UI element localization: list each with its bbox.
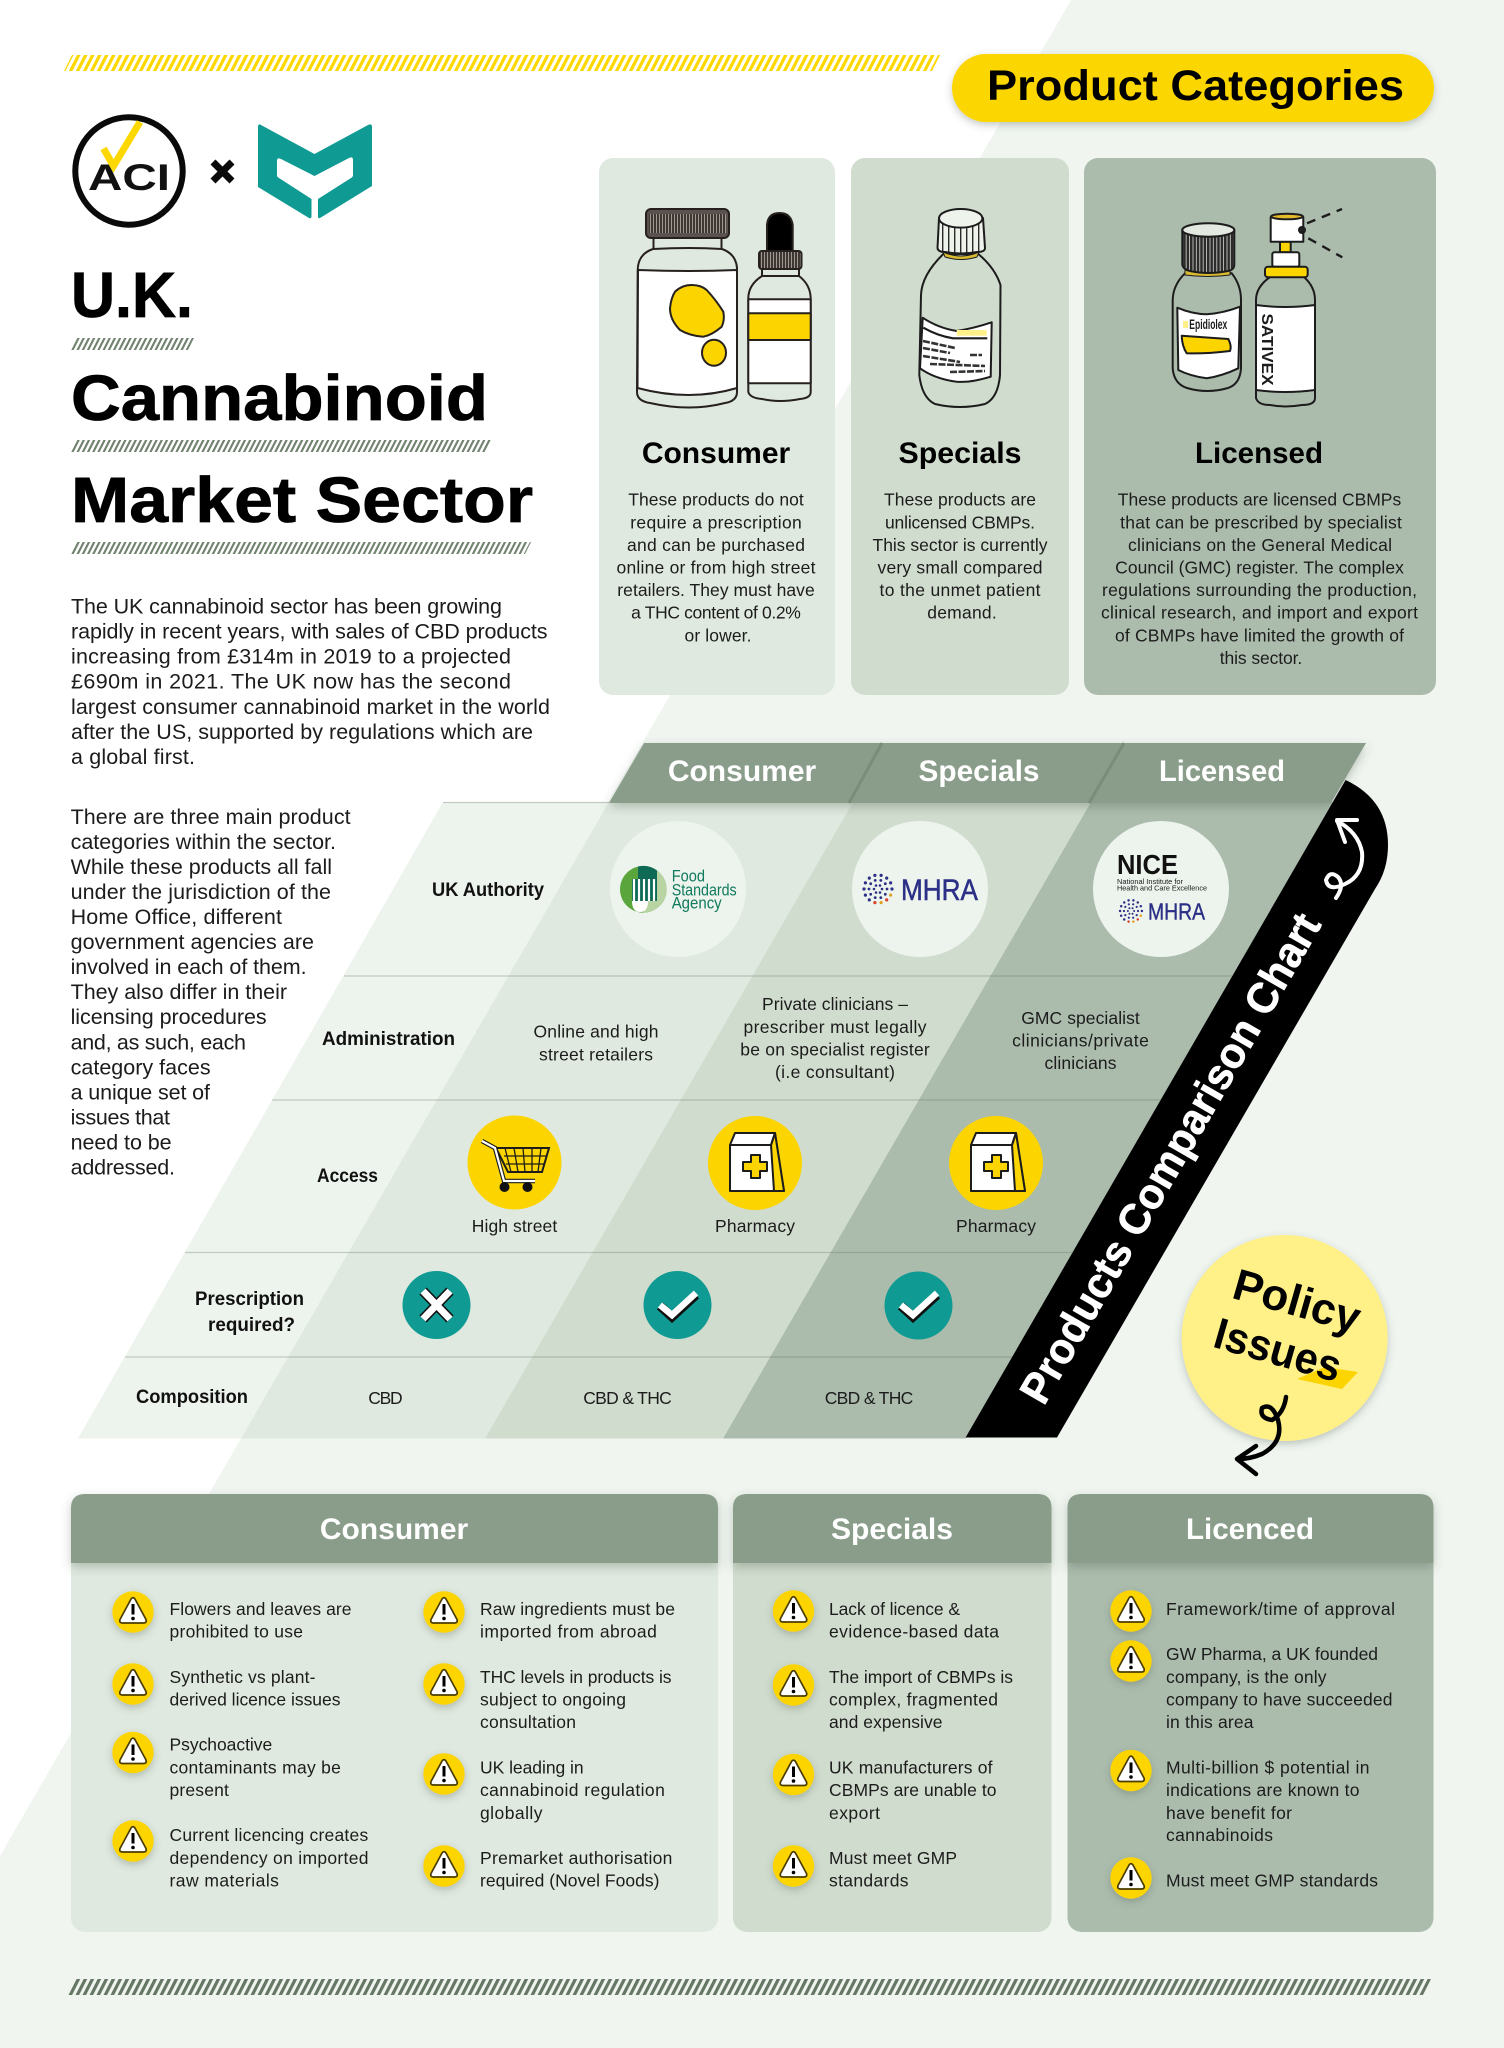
bottom stripe rule bbox=[68, 1979, 1431, 1995]
issue: psychoactive contaminants: contaminants may be bbox=[170, 1758, 341, 1778]
header: Consumer bbox=[71, 1494, 718, 1563]
row labels: UK Authority bbox=[432, 880, 544, 901]
panel: consumer product category bbox=[599, 158, 835, 695]
issue: lack of licence: Lack of licence & bbox=[829, 1599, 960, 1619]
row labels: Administration bbox=[322, 1029, 455, 1050]
issue: GMP standards: Must meet GMP bbox=[829, 1848, 957, 1868]
issue: THC levels: subject to ongoing bbox=[480, 1690, 626, 1710]
intro paragraph 2: addressed. bbox=[71, 1156, 175, 1180]
issue: GMP standards bbox=[1110, 1857, 1378, 1899]
issue: synthetic vs plant: Synthetic vs plant- bbox=[170, 1667, 316, 1687]
issue: UK leading bbox=[423, 1753, 665, 1823]
text: licensed description: These products are licensed CBMPs bbox=[1118, 490, 1401, 510]
text: specials description: unlicensed CBMPs. bbox=[885, 512, 1035, 532]
administration: licensed: clinicians bbox=[1044, 1053, 1117, 1073]
intro paragraph 2: and, as such, each bbox=[71, 1030, 246, 1054]
title: Cannabinoid bbox=[71, 362, 488, 434]
intro paragraph 1: a global first. bbox=[71, 745, 195, 769]
issue: multi-billion potential: Multi-billion $ potential in bbox=[1166, 1758, 1370, 1778]
callout: policy issues: Policy bbox=[1228, 1260, 1367, 1343]
intro paragraph 2: issues that bbox=[71, 1106, 170, 1130]
issue: synthetic vs plant: derived licence issues bbox=[170, 1690, 341, 1710]
text: licensed description: clinicians on the General Medical bbox=[1128, 535, 1392, 555]
issue: GW Pharma: company, is the only bbox=[1166, 1667, 1327, 1687]
text: specials description: demand. bbox=[927, 603, 997, 623]
icon: pharmacy bag bbox=[949, 1116, 1043, 1210]
logo: MHRA: MHRA bbox=[901, 874, 978, 907]
icon: times sign bbox=[213, 162, 232, 181]
issue: multi-billion potential: indications are known to bbox=[1166, 1780, 1360, 1800]
row labels bbox=[136, 880, 544, 1408]
administration: licensed bbox=[1012, 1008, 1149, 1073]
icon: cross bbox=[402, 1271, 470, 1339]
issue: UK leading: cannabinoid regulation bbox=[480, 1780, 665, 1800]
issue: GMP standards: standards bbox=[829, 1870, 909, 1890]
issue: synthetic vs plant bbox=[112, 1663, 341, 1710]
heading: Specials: Specials bbox=[898, 437, 1022, 470]
issue: multi-billion potential bbox=[1110, 1750, 1370, 1845]
chart column: licensed bbox=[723, 802, 1333, 1438]
administration: licensed: GMC specialist bbox=[1021, 1008, 1140, 1028]
issue: UK manufacturers bbox=[773, 1754, 996, 1823]
row labels: Composition bbox=[136, 1387, 248, 1408]
issue: UK manufacturers: export bbox=[829, 1803, 880, 1823]
issue: multi-billion potential: cannabinoids bbox=[1166, 1825, 1273, 1845]
logo: ACI bbox=[75, 117, 183, 225]
label: Pharmacy: Pharmacy bbox=[715, 1216, 795, 1236]
administration: specials: be on specialist register bbox=[740, 1040, 930, 1060]
chart column: labels bbox=[78, 802, 609, 1438]
white diagonal background bbox=[0, 0, 1071, 1856]
yellow stripe rule bbox=[64, 55, 940, 71]
row labels: required? bbox=[208, 1315, 295, 1336]
administration: consumer: street retailers bbox=[539, 1045, 653, 1065]
intro paragraph 2: There are three main product bbox=[71, 805, 351, 829]
issue: import of CBMPs: and expensive bbox=[829, 1712, 942, 1732]
issue: current licencing: dependency on imported bbox=[170, 1848, 368, 1868]
icon: shopping cart bbox=[468, 1116, 562, 1210]
intro paragraph 1: after the US, supported by regulations which are bbox=[71, 720, 533, 744]
text: specials description bbox=[872, 490, 1048, 623]
column header: Specials: Specials bbox=[918, 755, 1040, 788]
heading: Licensed: Licensed bbox=[1195, 437, 1323, 470]
text: consumer description bbox=[616, 490, 816, 645]
logo: teal book mark bbox=[258, 124, 372, 218]
intro paragraph 1: largest consumer cannabinoid market in the world bbox=[71, 695, 550, 719]
issue: GMP standards: Must meet GMP standards bbox=[1166, 1870, 1378, 1890]
issue: UK leading: UK leading in bbox=[480, 1758, 584, 1778]
header: Consumer: Consumer bbox=[320, 1513, 469, 1546]
row labels: Prescription bbox=[195, 1289, 304, 1310]
panel: licenced policy issues bbox=[1068, 1494, 1434, 1932]
issue: raw ingredients: Raw ingredients must be bbox=[480, 1599, 675, 1619]
text: consumer description: and can be purchased bbox=[627, 535, 805, 555]
section pill: Product Categories: Product Categories bbox=[987, 62, 1404, 110]
header: Licenced: Licenced bbox=[1186, 1513, 1314, 1546]
intro paragraph 2: under the jurisdiction of the bbox=[71, 880, 331, 904]
issue: premarket authorisation: Premarket authorisation bbox=[480, 1848, 672, 1868]
intro paragraph 2: licensing procedures bbox=[71, 1005, 267, 1029]
text: consumer description: These products do not bbox=[628, 490, 804, 510]
issue: current licencing bbox=[112, 1820, 369, 1890]
issue: THC levels: consultation bbox=[480, 1712, 576, 1732]
intro paragraph 2 bbox=[71, 805, 351, 1180]
issue: THC levels: THC levels in products is bbox=[480, 1667, 672, 1687]
intro paragraph 2: Home Office, different bbox=[71, 905, 282, 929]
text: consumer description: require a prescription bbox=[630, 512, 802, 532]
issue: GW Pharma: company to have succeeded bbox=[1166, 1690, 1392, 1710]
logo: NICE and MHRA: NICE bbox=[1117, 849, 1178, 880]
illustration: licensed bottles: Epidiolex bbox=[1189, 316, 1227, 332]
black band: products comparison chart bbox=[966, 780, 1388, 1438]
issue: UK manufacturers: CBMPs are unable to bbox=[829, 1780, 996, 1800]
text: specials description: These products are bbox=[884, 490, 1036, 510]
logo: MHRA bbox=[852, 821, 988, 957]
issue: current licencing: raw materials bbox=[170, 1870, 279, 1890]
intro paragraph 1: rapidly in recent years, with sales of CBD products bbox=[71, 620, 548, 644]
intro paragraph 2: They also differ in their bbox=[71, 980, 287, 1004]
administration: licensed: clinicians/private bbox=[1012, 1030, 1149, 1050]
issue: GMP standards bbox=[773, 1845, 957, 1890]
logo: Food Standards Agency bbox=[610, 821, 746, 957]
text: consumer description: retailers. They must have bbox=[617, 580, 815, 600]
panel: licensed product category bbox=[1084, 158, 1436, 695]
title bbox=[71, 259, 533, 554]
intro paragraph 2: categories within the sector. bbox=[71, 830, 336, 854]
issue: multi-billion potential: have benefit for bbox=[1166, 1803, 1292, 1823]
intro paragraph 2: need to be bbox=[71, 1130, 172, 1154]
chart column: consumer bbox=[241, 802, 853, 1438]
administration: specials: prescriber must legally bbox=[744, 1017, 927, 1037]
illustration: specials bottle bbox=[919, 209, 1000, 407]
label: Sativex: SATIVEX bbox=[1258, 314, 1275, 386]
callout: policy issues bbox=[1182, 1235, 1388, 1474]
composition: licensed: CBD & THC bbox=[825, 1388, 913, 1408]
issue: UK leading: globally bbox=[480, 1803, 543, 1823]
text: specials description: to the unmet patient bbox=[880, 580, 1041, 600]
administration: specials: Private clinicians – bbox=[762, 994, 908, 1014]
issue: raw ingredients: imported from abroad bbox=[480, 1622, 657, 1642]
chart header band bbox=[609, 743, 1366, 803]
issue: GW Pharma bbox=[1110, 1640, 1392, 1732]
column header: Licensed: Licensed bbox=[1159, 755, 1285, 788]
title: Market Sector bbox=[71, 464, 533, 536]
text: specials description: This sector is currently bbox=[872, 535, 1048, 555]
issue: import of CBMPs bbox=[773, 1664, 1013, 1732]
intro paragraph 2: involved in each of them. bbox=[71, 955, 307, 979]
issue: flowers and leaves: prohibited to use bbox=[170, 1622, 303, 1642]
issue: flowers and leaves: Flowers and leaves are bbox=[170, 1599, 352, 1619]
chart column: specials bbox=[485, 802, 1091, 1438]
icon: pharmacy bag bbox=[708, 1116, 802, 1210]
header: Licenced bbox=[1068, 1494, 1434, 1563]
header: Specials bbox=[733, 1494, 1052, 1563]
icon: check bbox=[884, 1272, 952, 1340]
issue: psychoactive contaminants: present bbox=[170, 1780, 229, 1800]
composition: consumer: CBD bbox=[368, 1388, 403, 1408]
heading: Consumer: Consumer bbox=[642, 437, 791, 470]
arrow: white squiggle bbox=[1326, 820, 1362, 898]
issue: GW Pharma: GW Pharma, a UK founded bbox=[1166, 1644, 1378, 1664]
icon: check bbox=[644, 1271, 712, 1339]
text: consumer description: a THC content of 0.2% bbox=[631, 603, 801, 623]
composition: specials: CBD & THC bbox=[583, 1388, 672, 1408]
label: Pharmacy: Pharmacy bbox=[956, 1216, 1036, 1236]
logo: Food Standards Agency: Agency bbox=[672, 894, 722, 912]
administration: consumer: Online and high bbox=[534, 1022, 658, 1042]
intro paragraph 2: category faces bbox=[71, 1055, 211, 1079]
administration: specials: (i.e consultant) bbox=[775, 1062, 895, 1082]
panel: consumer policy issues bbox=[71, 1494, 718, 1932]
issue: premarket authorisation: required (Novel Foods) bbox=[480, 1870, 660, 1890]
row labels: Access bbox=[317, 1166, 378, 1187]
issue: psychoactive contaminants bbox=[112, 1732, 341, 1800]
intro paragraph 2: a unique set of bbox=[71, 1080, 210, 1104]
section pill: Product Categories bbox=[952, 54, 1434, 122]
logo: Food Standards Agency: Food bbox=[672, 868, 705, 886]
issue: current licencing: Current licencing creates bbox=[170, 1825, 368, 1845]
text: licensed description: regulations surrounding the production, bbox=[1102, 580, 1417, 600]
issue: framework: Framework/time of approval bbox=[1166, 1599, 1395, 1619]
column header: Consumer: Consumer bbox=[668, 755, 817, 788]
issue: flowers and leaves bbox=[112, 1591, 352, 1642]
issue: raw ingredients bbox=[423, 1591, 675, 1642]
panel: specials product category bbox=[851, 158, 1069, 695]
logo: NICE and MHRA: National Institute for bbox=[1117, 877, 1183, 886]
chart: products comparison bbox=[78, 743, 1388, 1438]
header: Specials: Specials bbox=[831, 1513, 953, 1546]
logo: ACI: ACI bbox=[88, 157, 170, 198]
logo: NICE and MHRA: Health and Care Excellence bbox=[1117, 884, 1207, 892]
text: licensed description: that can be prescribed by specialist bbox=[1120, 512, 1402, 532]
text: licensed description: clinical research, and import and export bbox=[1101, 603, 1418, 623]
text: licensed description: of CBMPs have limited the growth of bbox=[1115, 625, 1404, 645]
intro paragraph 1: The UK cannabinoid sector has been growing bbox=[71, 594, 502, 618]
label: High street: High street bbox=[472, 1216, 557, 1236]
text: licensed description: this sector. bbox=[1220, 648, 1302, 668]
band label: Products Comparison Chart bbox=[1011, 905, 1331, 1412]
logo: NICE and MHRA bbox=[1093, 821, 1229, 957]
administration: specials bbox=[740, 994, 930, 1082]
intro paragraph 2: government agencies are bbox=[71, 930, 314, 954]
issue: framework bbox=[1110, 1590, 1395, 1632]
issue: import of CBMPs: The import of CBMPs is bbox=[829, 1667, 1013, 1687]
issue: THC levels bbox=[423, 1663, 672, 1732]
illustration: licensed bottles bbox=[1173, 209, 1342, 406]
logo: Food Standards Agency: Standards bbox=[672, 882, 737, 900]
text: specials description: very small compared bbox=[878, 558, 1042, 578]
issue: import of CBMPs: complex, fragmented bbox=[829, 1690, 998, 1710]
issue: UK manufacturers: UK manufacturers of bbox=[829, 1758, 993, 1778]
issue: psychoactive contaminants: Psychoactive bbox=[170, 1735, 272, 1755]
text: consumer description: online or from high street bbox=[616, 558, 816, 578]
intro paragraph 1 bbox=[71, 594, 550, 769]
issue: lack of licence bbox=[773, 1590, 999, 1642]
text: consumer description: or lower. bbox=[684, 625, 752, 645]
issue: GW Pharma: in this area bbox=[1166, 1712, 1254, 1732]
callout: policy issues: Issues bbox=[1209, 1309, 1347, 1392]
issue: lack of licence: evidence-based data bbox=[829, 1622, 999, 1642]
administration: consumer bbox=[534, 1022, 658, 1065]
logo: NICE and MHRA: MHRA bbox=[1148, 898, 1206, 924]
title: U.K. bbox=[71, 259, 193, 331]
arrow: black squiggle bbox=[1237, 1397, 1286, 1474]
text: licensed description: Council (GMC) register. The complex bbox=[1115, 558, 1404, 578]
intro paragraph 2: While these products all fall bbox=[71, 855, 332, 879]
issue: premarket authorisation bbox=[423, 1845, 672, 1890]
panel: specials policy issues bbox=[733, 1494, 1052, 1932]
text: licensed description bbox=[1101, 490, 1418, 668]
intro paragraph 1: increasing from £314m in 2019 to a projected bbox=[71, 645, 511, 669]
illustration: consumer bottles bbox=[637, 209, 811, 408]
intro paragraph 1: £690m in 2021. The UK now has the second bbox=[71, 670, 511, 694]
